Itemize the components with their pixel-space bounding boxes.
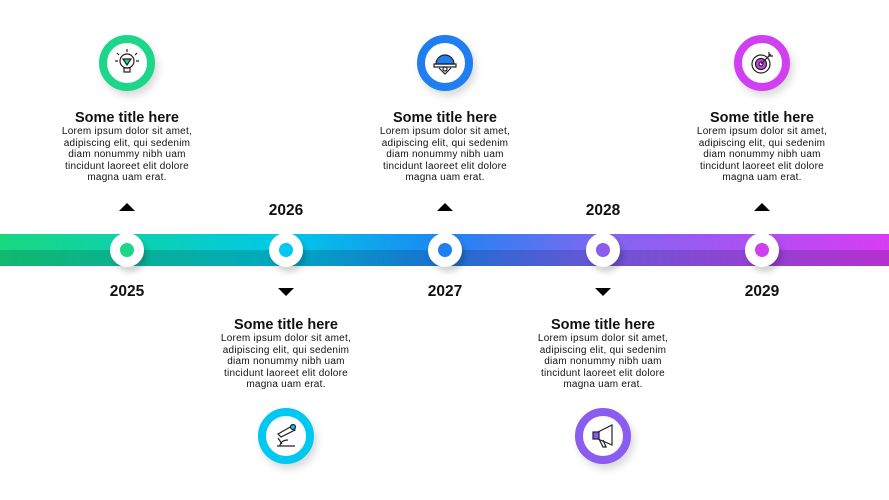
arrow up 2025 bbox=[119, 203, 135, 211]
text 2027: Some title here bbox=[393, 110, 497, 126]
year 2028: 2028 bbox=[586, 202, 620, 219]
text 2026: diam nonummy nibh uam bbox=[227, 356, 345, 367]
year 2027: 2027 bbox=[428, 283, 462, 300]
text 2029 bbox=[697, 110, 827, 183]
text 2028: tincidunt laoreet elit dolore bbox=[541, 368, 665, 379]
text 2026: tincidunt laoreet elit dolore bbox=[224, 368, 348, 379]
arrow down 2026 bbox=[278, 288, 294, 296]
text 2026: Some title here bbox=[234, 317, 338, 333]
text 2028: Lorem ipsum dolor sit amet, bbox=[538, 333, 668, 344]
text 2027 bbox=[380, 110, 510, 183]
icon: microscope bbox=[258, 408, 314, 464]
text 2026: Lorem ipsum dolor sit amet, bbox=[221, 333, 351, 344]
text 2028: diam nonummy nibh uam bbox=[544, 356, 662, 367]
text 2026 bbox=[221, 317, 351, 390]
text 2028: adipiscing elit, qui sedenim bbox=[540, 345, 666, 356]
text 2029: adipiscing elit, qui sedenim bbox=[699, 138, 825, 149]
node 2027 bbox=[428, 233, 462, 267]
arrow up 2029 bbox=[754, 203, 770, 211]
text 2027: diam nonummy nibh uam bbox=[386, 149, 504, 160]
icon: target bbox=[734, 35, 790, 91]
text 2027: magna uam erat. bbox=[405, 172, 485, 183]
icon: megaphone bbox=[575, 408, 631, 464]
text 2027: Lorem ipsum dolor sit amet, bbox=[380, 126, 510, 137]
text 2027: tincidunt laoreet elit dolore bbox=[383, 161, 507, 172]
node 2029 bbox=[745, 233, 779, 267]
node 2028 bbox=[586, 233, 620, 267]
icon: helmet bbox=[417, 35, 473, 91]
text 2026: magna uam erat. bbox=[246, 379, 326, 390]
text 2026: adipiscing elit, qui sedenim bbox=[223, 345, 349, 356]
node 2026 bbox=[269, 233, 303, 267]
year 2025: 2025 bbox=[110, 283, 144, 300]
text 2025: diam nonummy nibh uam bbox=[68, 149, 186, 160]
text 2025: Lorem ipsum dolor sit amet, bbox=[62, 126, 192, 137]
text 2025: adipiscing elit, qui sedenim bbox=[64, 138, 190, 149]
year 2029: 2029 bbox=[745, 283, 779, 300]
icon: lightbulb bbox=[99, 35, 155, 91]
timeline bar bbox=[0, 234, 889, 266]
node 2025 bbox=[110, 233, 144, 267]
text 2027: adipiscing elit, qui sedenim bbox=[382, 138, 508, 149]
year 2026: 2026 bbox=[269, 202, 303, 219]
text 2029: magna uam erat. bbox=[722, 172, 802, 183]
arrow up 2027 bbox=[437, 203, 453, 211]
text 2028 bbox=[538, 317, 668, 390]
text 2029: tincidunt laoreet elit dolore bbox=[700, 161, 824, 172]
text 2029: Some title here bbox=[710, 110, 814, 126]
text 2025: Some title here bbox=[75, 110, 179, 126]
text 2025 bbox=[62, 110, 192, 183]
text 2029: diam nonummy nibh uam bbox=[703, 149, 821, 160]
text 2028: Some title here bbox=[551, 317, 655, 333]
text 2025: tincidunt laoreet elit dolore bbox=[65, 161, 189, 172]
text 2029: Lorem ipsum dolor sit amet, bbox=[697, 126, 827, 137]
text 2025: magna uam erat. bbox=[87, 172, 167, 183]
arrow down 2028 bbox=[595, 288, 611, 296]
text 2028: magna uam erat. bbox=[563, 379, 643, 390]
